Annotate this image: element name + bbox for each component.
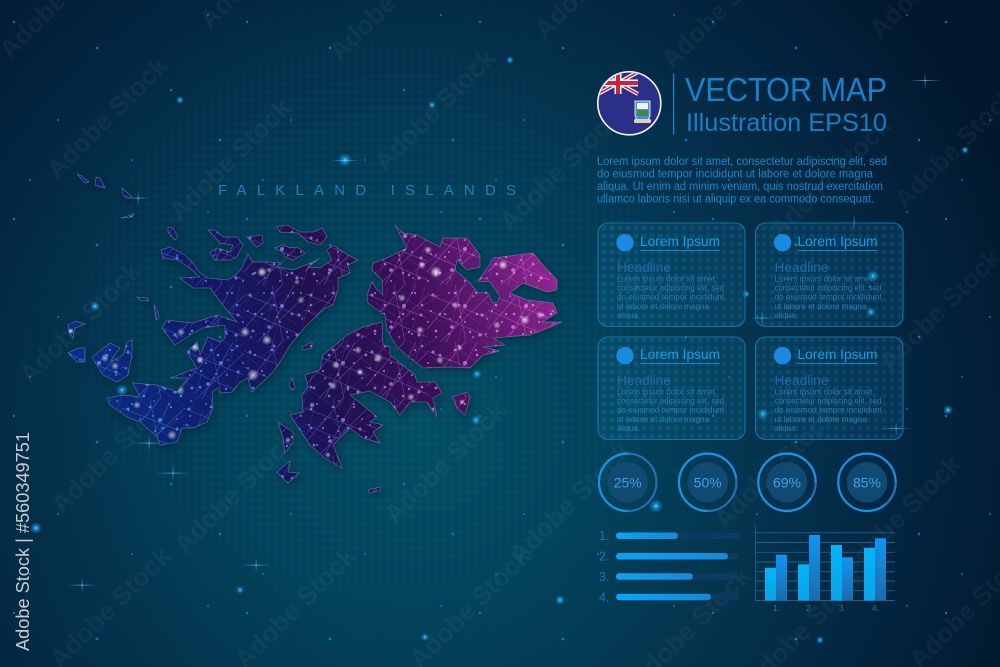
flag: union jack bbox=[598, 72, 638, 94]
card body: ut labore et dolore magna bbox=[774, 301, 867, 311]
card body bbox=[774, 386, 882, 433]
watermarks: Adobe Stock: Adobe Stock bbox=[40, 50, 174, 184]
card headline: Headline bbox=[774, 260, 828, 275]
card body: aliqua. bbox=[617, 310, 640, 320]
bars group 1 bbox=[765, 555, 787, 600]
donut: 85% bbox=[838, 454, 896, 511]
donut: 50%: 50% bbox=[694, 474, 722, 490]
intro paragraph bbox=[597, 156, 887, 206]
heading divider bbox=[673, 74, 674, 134]
donut: 25%: 25% bbox=[614, 474, 642, 490]
watermarks: Adobe Stock: Adobe Stock bbox=[45, 385, 179, 519]
bars group 2 bbox=[798, 535, 820, 600]
panel: top right card bbox=[756, 223, 903, 326]
donut: 69% bbox=[758, 454, 816, 511]
watermarks: Adobe Stock: Adobe Stock bbox=[163, 92, 297, 226]
bar chart bbox=[756, 525, 895, 613]
watermarks: Adobe Stock: Adobe Stock bbox=[708, 400, 842, 534]
card headline: Headline bbox=[617, 260, 671, 275]
card bullet bbox=[616, 347, 634, 364]
intro paragraph: aliqua. Ut enim ad minim veniam, quis nostrud exercitation bbox=[597, 181, 883, 193]
chart axis labels bbox=[773, 603, 879, 613]
map: Falkland Islands bbox=[68, 174, 562, 496]
progress row 4: 4. bbox=[599, 590, 609, 604]
progress row 3: 3. bbox=[599, 570, 609, 584]
card body: do eiusmod tempor incididunt bbox=[774, 292, 882, 302]
card body: Lorem ipsum dolor sit amet, bbox=[774, 386, 874, 396]
card body: aliqua. bbox=[774, 423, 798, 433]
watermarks: Adobe Stock: Adobe Stock bbox=[168, 425, 302, 559]
card body: Lorem ipsum dolor sit amet, bbox=[774, 274, 874, 284]
watermarks: Adobe Stock: Adobe Stock bbox=[763, 110, 897, 244]
card body: do eiusmod tempor incididunt bbox=[774, 405, 882, 415]
card body: ut labore et dolore magna bbox=[774, 414, 867, 424]
chart axis labels: 2. bbox=[806, 603, 813, 613]
panel: top left card bbox=[598, 223, 745, 326]
card bullet bbox=[774, 234, 791, 251]
watermarks: Adobe Stock: Adobe Stock bbox=[13, 255, 147, 389]
card body: aliqua. bbox=[774, 310, 798, 320]
card bullet bbox=[616, 234, 634, 251]
progress bars bbox=[599, 529, 739, 604]
progress row 2: 2. bbox=[599, 550, 609, 564]
flag: coat of arms bbox=[634, 101, 651, 123]
heading: Vector Map: VECTOR MAP bbox=[685, 71, 887, 108]
donut: 69%: 69% bbox=[773, 474, 801, 490]
subheading: Illustration EPS10: Illustration EPS10 bbox=[686, 109, 887, 137]
card body bbox=[774, 274, 882, 320]
card body: consectetur adipiscing elit, sed bbox=[617, 282, 724, 292]
watermarks: Adobe Stock: Adobe Stock bbox=[833, 448, 967, 582]
watermarks: Adobe Stock: Adobe Stock bbox=[503, 435, 637, 569]
card headline: Headline bbox=[774, 373, 828, 388]
progress row 1: 1. bbox=[599, 529, 609, 543]
flag: Falkland Islands bbox=[598, 72, 661, 135]
bars group 4 bbox=[864, 538, 886, 600]
watermarks: Adobe Stock: Adobe Stock bbox=[493, 102, 627, 236]
donut: 85%: 85% bbox=[853, 474, 881, 490]
card title: Lorem Ipsum bbox=[640, 234, 720, 249]
map city lights bbox=[68, 233, 544, 458]
card body: consectetur adipiscing elit, sed bbox=[774, 396, 882, 406]
card body: consectetur adipiscing elit, sed bbox=[617, 396, 724, 406]
watermarks: Adobe Stock: Adobe Stock bbox=[378, 395, 512, 529]
card headline: Headline bbox=[617, 373, 671, 388]
card bullet bbox=[774, 347, 791, 364]
card body: do eiusmod tempor incididunt bbox=[617, 292, 725, 302]
card body: Lorem ipsum dolor sit amet, bbox=[617, 274, 717, 284]
card title: Lorem Ipsum bbox=[798, 234, 878, 249]
intro paragraph: Lorem ipsum dolor sit amet, consectetur adipiscing elit, sed bbox=[597, 156, 887, 168]
bars group 3 bbox=[831, 545, 853, 600]
intro paragraph: ullamco laboris nisi ut aliquip ex ea commodo consequat. bbox=[597, 194, 874, 206]
donut: 50% bbox=[679, 454, 736, 511]
card body bbox=[617, 386, 725, 433]
card title: Lorem Ipsum bbox=[640, 347, 720, 362]
panel: bottom left card bbox=[598, 337, 745, 440]
card body: do eiusmod tempor incididunt bbox=[617, 405, 725, 415]
watermarks: Adobe Stock: Adobe Stock bbox=[368, 42, 502, 176]
card body: ut labore et dolore magna bbox=[617, 414, 709, 424]
card title: Lorem Ipsum bbox=[798, 347, 878, 362]
card body: ut labore et dolore magna bbox=[617, 301, 709, 311]
card body: consectetur adipiscing elit, sed bbox=[774, 282, 882, 292]
stock id label: Adobe Stock | #560349751 bbox=[13, 432, 33, 651]
donut: 25% bbox=[599, 454, 656, 511]
card body: aliqua. bbox=[617, 423, 640, 433]
intro paragraph: do eiusmod tempor incididunt ut labore et dolore magna bbox=[597, 168, 874, 180]
chart axis labels: 3. bbox=[839, 603, 846, 613]
chart axis labels: 4. bbox=[872, 603, 879, 613]
card body bbox=[617, 274, 725, 320]
map title: Falkland Islands: FALKLAND ISLANDS bbox=[218, 182, 516, 199]
panel: bottom right card bbox=[756, 337, 903, 440]
card body: Lorem ipsum dolor sit amet, bbox=[617, 386, 717, 396]
chart axis labels: 1. bbox=[773, 603, 780, 613]
